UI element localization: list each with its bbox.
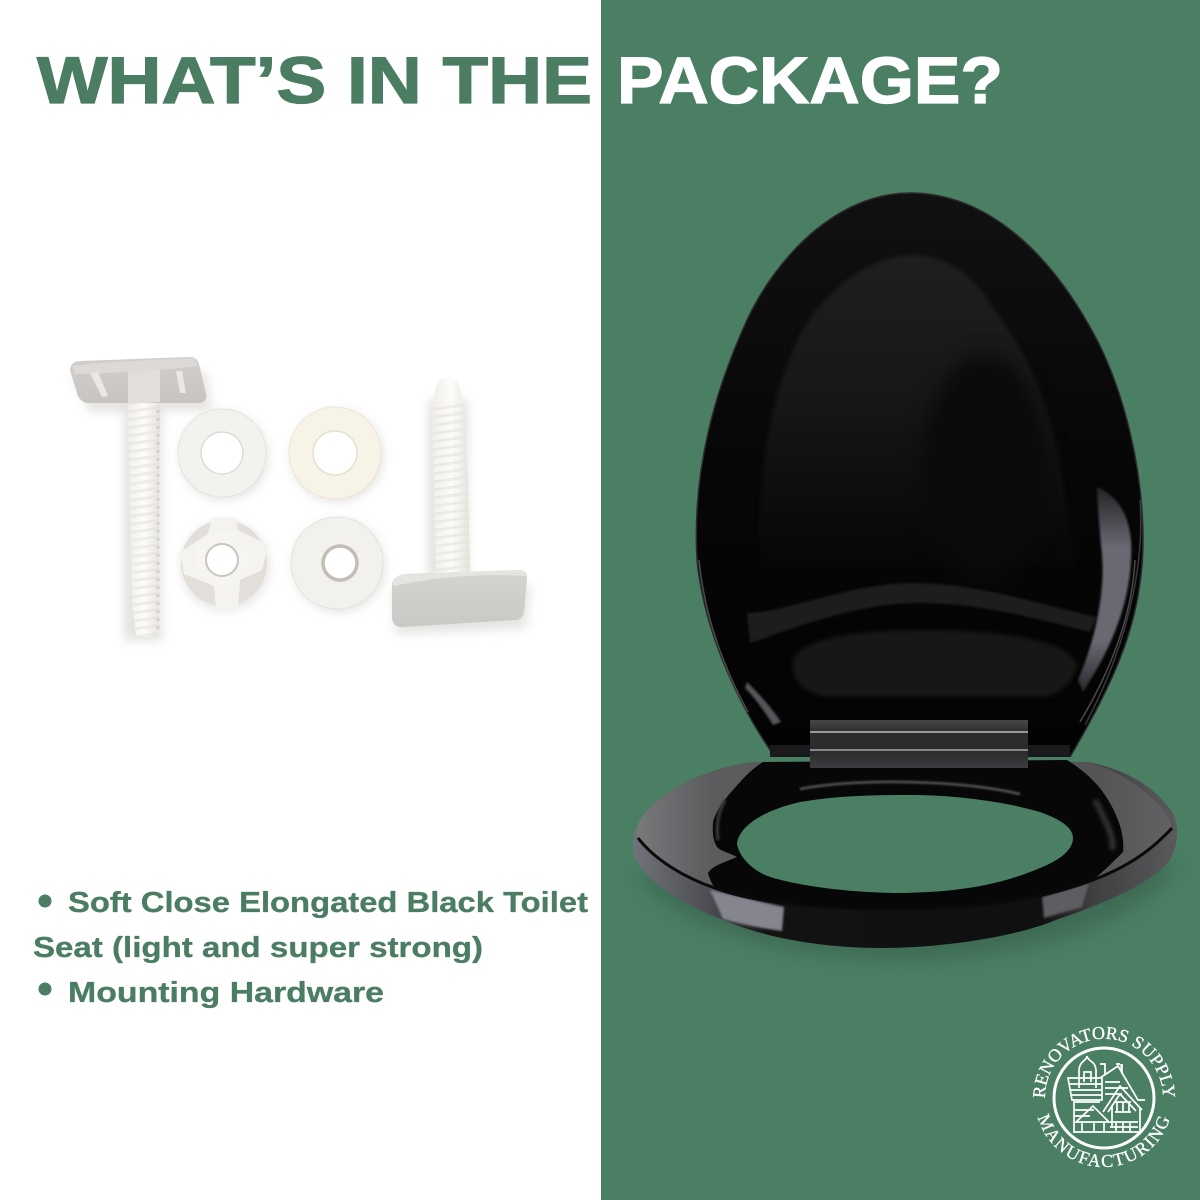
hinge <box>770 720 1070 768</box>
illustration: black toilet seat <box>633 193 1178 960</box>
nut 2 <box>291 517 383 609</box>
bullet text line 2: Seat (light and super strong) <box>33 932 483 964</box>
bullet list <box>33 887 588 1009</box>
logo: Renovators Supply Manufacturing <box>1032 1026 1176 1168</box>
logo house drawing <box>1068 1056 1145 1132</box>
seat shadow <box>636 860 1178 960</box>
logo ring <box>1054 1048 1154 1148</box>
right bolt <box>392 378 527 627</box>
ring top surface <box>637 762 1172 909</box>
title part: green: WHAT’S IN THE <box>37 43 592 117</box>
washer 1 <box>178 409 266 497</box>
bullet text line 3: Mounting Hardware <box>68 977 384 1009</box>
soft shadow below hardware <box>72 372 530 641</box>
illustration: mounting hardware <box>70 357 530 641</box>
ring recess highlights <box>800 782 1020 794</box>
lid lower oval reflection <box>793 630 1077 697</box>
logo top text: RENOVATORS SUPPLY <box>1032 1026 1176 1098</box>
ring front edge <box>633 762 1177 948</box>
washer 2 <box>289 407 381 499</box>
logo bottom text: MANUFACTURING <box>1037 1113 1169 1168</box>
title part: white: PACKAGE? <box>617 43 1003 117</box>
seat ring <box>633 760 1177 948</box>
bullet dot 2 <box>38 982 52 996</box>
lid <box>696 193 1143 757</box>
lid dark reflection right <box>923 355 1047 585</box>
background: left white panel <box>0 0 601 1200</box>
bullet text line 1: Soft Close Elongated Black Toilet <box>68 887 588 919</box>
left bolt <box>70 357 206 637</box>
ring recessed inner band <box>708 760 1123 909</box>
background: right green panel <box>601 0 1200 1200</box>
nut 1 <box>180 517 268 609</box>
seat opening <box>737 795 1073 893</box>
lid right crescent highlight <box>1078 487 1131 692</box>
ring edge highlight right <box>1042 883 1089 918</box>
lid inner dome reflection <box>759 255 1075 570</box>
title <box>37 43 1003 117</box>
ring edge highlight left <box>710 890 784 931</box>
bullet dot 1 <box>38 894 52 908</box>
lid gloss band <box>747 583 1097 643</box>
lid left rim highlights <box>745 682 781 725</box>
